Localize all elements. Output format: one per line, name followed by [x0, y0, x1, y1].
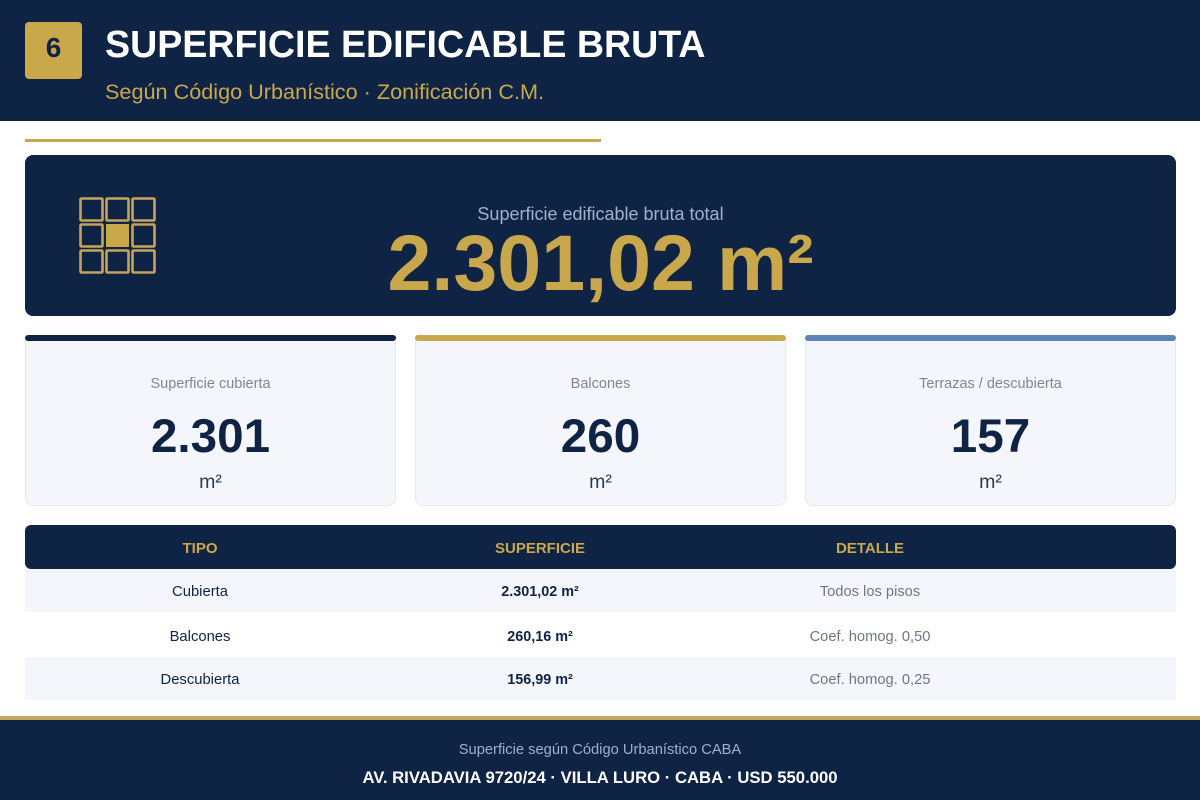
footer note: Superficie según Código Urbanístico CABA: [459, 742, 741, 758]
table header: SUPERFICIE: [495, 540, 585, 557]
row: descubierta: 156,99 m²: [507, 672, 573, 688]
card: balconies: [415, 335, 786, 506]
total value: 2.301,02 m²: [387, 218, 814, 307]
card: covered surface: [25, 335, 396, 506]
footer: [0, 716, 1200, 800]
card: terraces: Terrazas / descubierta: [919, 376, 1062, 392]
title: SUPERFICIE EDIFICABLE BRUTA: [105, 23, 706, 65]
card: terraces: [805, 335, 1176, 506]
footer address: AV. RIVADAVIA 9720/24 · VILLA LURO · CABA · USD 550.000: [362, 768, 838, 787]
row: balcones: Coef. homog. 0,50: [810, 629, 930, 645]
row: descubierta: Descubierta: [161, 672, 239, 688]
row: cubierta: 2.301,02 m²: [501, 584, 579, 600]
section number badge: 6: [46, 32, 61, 63]
panel: total surface: [25, 155, 1176, 316]
card: terraces: m²: [979, 471, 1002, 493]
card: balconies: m²: [589, 471, 612, 493]
table: [25, 525, 1176, 700]
card: covered surface: m²: [199, 471, 222, 493]
row: cubierta: [25, 569, 1176, 612]
card: terraces: 157: [951, 410, 1030, 463]
header band: [0, 0, 1200, 121]
table header: TIPO: [182, 540, 218, 557]
card: balconies: Balcones: [571, 376, 630, 392]
section number badge: [25, 22, 82, 79]
row: cubierta: Cubierta: [172, 584, 228, 600]
row: balcones: Balcones: [170, 629, 230, 645]
table header: [25, 525, 1176, 569]
row: balcones: 260,16 m²: [507, 629, 573, 645]
table header: DETALLE: [836, 540, 904, 557]
row: descubierta: [25, 657, 1176, 700]
icon: grid: [79, 197, 156, 274]
row: balcones: [25, 613, 1176, 657]
card: covered surface: 2.301: [151, 410, 270, 463]
row: descubierta: Coef. homog. 0,25: [810, 672, 930, 688]
card: covered surface: Superficie cubierta: [150, 376, 271, 392]
total label: Superficie edificable bruta total: [477, 204, 724, 224]
gold accent rule: [25, 139, 601, 142]
card: balconies: 260: [561, 410, 640, 463]
row: cubierta: Todos los pisos: [820, 584, 920, 600]
subtitle: Según Código Urbanístico · Zonificación C.M.: [105, 79, 544, 104]
